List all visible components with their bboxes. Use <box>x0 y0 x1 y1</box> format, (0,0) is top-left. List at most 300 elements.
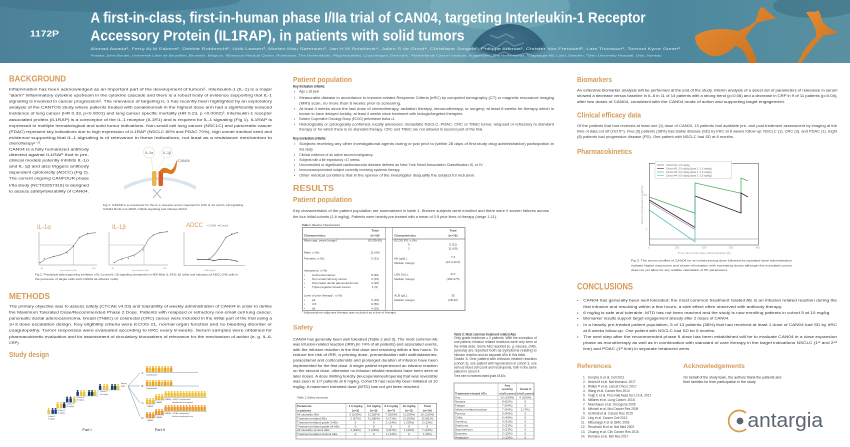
heading: pharmacokinetics: Pharmacokinetics <box>577 149 632 156</box>
chart: IL-1 beta: Concentration (nM) <box>131 269 149 272</box>
text block: background intro: Inflammation has been acknowledged as an important part of the development of tumors¹. Interleukin-1 (IL-1) is a major <box>9 86 273 91</box>
text block: reference list: 4. <box>583 389 586 393</box>
panel: acknowledgements <box>683 363 782 384</box>
text block: inclusion criteria: Age ≥ 18 year. <box>299 90 320 94</box>
chart: ADCC: CAN (µg/mL) <box>204 269 216 272</box>
text block: background intro: “alarm” inflammatory cytokine upstream in the cytokine cascade and there is a robust body of evidence supporting that IL-1 <box>9 92 272 98</box>
text block: inclusion criteria: • <box>294 122 295 126</box>
heading: references: References <box>577 363 612 370</box>
table 2: safety summary: 1 (6%) <box>423 432 432 436</box>
title <box>90 10 646 44</box>
chart: ADCC: CAN04 <box>208 224 217 228</box>
text block: methods: The primary objective was to assess safety (CTCAE v4.03) and tolerability of weekly administration of CAN04 in order to define <box>9 304 272 308</box>
text block: reference list: Muenbauer et al. Oncogene 2006 <box>588 402 636 406</box>
text block: background intro: associated protein (IL1RAP) is a coreceptor of the IL-1 receptor (IL1R1) and is required for IL-1 signaling (Fig 1). IL1RAP is <box>9 117 272 122</box>
axes labels: 1 <box>646 227 648 231</box>
text block: conclusions: • <box>577 334 579 339</box>
table 3: treatment related adverse events: 8 (62%) <box>502 400 513 404</box>
table 2: safety summary: 16 (100%) <box>420 413 434 417</box>
part II arms: CAN04 + NSCLC combination <box>165 398 190 401</box>
table 1: baseline characteristics: (182-475) <box>446 277 460 281</box>
table 2: safety summary: Parameter, <box>297 404 313 408</box>
text block: table 3 note: infusion reaction and as separate AEs in this table. <box>454 353 526 357</box>
text block: reference list: Reuchard M et al. Nat Med 2003 <box>588 425 634 429</box>
text block: exclusion criteria: Immunocompromised subject currently receiving systemic therapy. <box>299 168 400 172</box>
table 3: treatment related adverse events: Infusion-related reaction <box>455 408 488 412</box>
title: A first-in-class, first-in-human phase I/IIa trial of CAN04, targeting Interleukin-1 Receptor <box>90 10 646 26</box>
text block: conclusions: 6 mg/kg is safe and tolerable. MTD has not been reached and the study is now enrolling patients in cohort 5 at 10 mg/kg <box>583 310 829 315</box>
text block: reference list: 5. <box>583 394 586 398</box>
text block: exclusion criteria: • <box>294 174 295 178</box>
text block: reference list: Zhuang et al. Clin Cancer Res 2015 <box>588 430 639 434</box>
table 1: baseline characteristics: 3 (19) <box>371 277 379 281</box>
text block: safety: CAN04 has generally been well tolerated (Table 2 and 3). The most common AE <box>293 336 438 341</box>
table 3: treatment related adverse events: Any <box>455 396 461 400</box>
text block: inclusion criteria: At least 4 weeks since the last dose of chemotherapy, radiation therapy, immunotherapy, or surgery; at least 6 weeks for therapy which is <box>299 107 555 111</box>
text block: CAN04 description: The current ongoing CANFOUR phase <box>9 175 89 180</box>
text block: conclusions: phase as monotherapy as well as in combination with standard of care therapy in the target indications NSCLC (1ˢᵗ and 2ⁿᵈ <box>583 340 838 345</box>
table 1: baseline characteristics: • <box>304 277 305 281</box>
text block: safety: paracetamol and corticosteroids and prolonged duration of infusion have been <box>293 358 438 362</box>
table 3: treatment related adverse events: 0 <box>524 428 526 432</box>
chart: IL-1 alpha <box>37 225 97 272</box>
table 3: treatment related adverse events: 3 (23%) <box>502 424 513 428</box>
legend: Cohort #3: 6.0 mg/kg (dose 1: 1.0 mg/kg) <box>666 171 712 174</box>
text block: reference list: 9. <box>583 412 586 416</box>
text block: inclusion criteria: known to have delayed toxicity; at least 4 weeks since treatment with biologic/targeted therapies. <box>299 112 463 116</box>
text block: clinical efficacy: time of data cut off (Oct 5ᵗʰ). Five (5) patients (38%) had stable disease (SD) by IrRC at 8 weeks follow-up: NSCLC (1), CRC (3), and PDAC (1). Eight <box>577 130 837 134</box>
header banner <box>0 0 850 63</box>
text block: reference list: 3. <box>583 384 586 388</box>
part I cohort escalation: Cohort 2 <box>58 409 65 412</box>
table 1: baseline characteristics: • <box>304 302 305 306</box>
table 2: safety summary: Total <box>424 404 431 408</box>
chart: IL-1 alpha: -10 <box>40 268 44 270</box>
text block: acknowledgements <box>683 375 782 384</box>
part II arms: CAN04 <box>147 405 153 408</box>
text block: reference list: Ridker P et al. Lancet Oncol. 2017 <box>588 384 637 388</box>
text block: reference list: Mitsunaga K et al. BMC 2003 <box>588 421 630 425</box>
table 2: safety summary: 3 (100%) <box>368 416 380 420</box>
text block: reference list: 14. <box>581 434 586 438</box>
table 2: safety summary: 1 (14%) <box>386 420 397 424</box>
table 1: baseline characteristics: Characteristics <box>394 234 416 238</box>
table 1: baseline characteristics: 8 (50) <box>371 273 379 277</box>
table 1: baseline characteristics: ≥6 <box>312 306 316 310</box>
table 1: baseline characteristics: • <box>304 281 305 285</box>
table 2: safety summary: Treatment-related grade 3 AEs <box>297 420 338 424</box>
text block: safety: was infusion-related reaction (IRR) (in 74% of all patients) and associated events, <box>293 342 438 347</box>
caption: figure 3: does not yet allow for any reliable calculation of PK parameters. <box>631 268 728 272</box>
text block: background intro: (PDAC) represent key indications due to high expression of IL1RAP (NSCLC 80% and PDAC 70%), high unmet medical need and <box>9 129 272 134</box>
table 1: baseline characteristics: Median (range) <box>394 261 415 265</box>
text block: table 3 note: one patient, infusion related reactions were only seen at <box>454 340 537 344</box>
text block: patient summary: Key characteristics of the patient population are summarized in table 1. Sixteen subjects were enrolled and there were 0 screen failures across <box>293 209 550 213</box>
table 1: baseline characteristics: ECOG PS, n (%) <box>394 238 417 242</box>
table 2: safety summary: 0 <box>373 432 375 436</box>
table 2: safety summary: 1 (14%) <box>386 432 397 436</box>
text block: reference list: 12. <box>581 425 586 429</box>
table 3: treatment related adverse events: 2 (15%) <box>502 436 513 440</box>
table 1: baseline characteristics: 11 (69) <box>448 246 458 250</box>
table 3: treatment related adverse events: 6 (46%) <box>502 412 513 416</box>
table 2: safety summary: 3 (100%) <box>403 416 415 420</box>
table 1: baseline characteristics: 4 (25) <box>371 306 379 310</box>
table 2: safety summary: 3.0 mg/kg <box>367 404 381 408</box>
part II arms: A <box>142 371 144 375</box>
table 3: treatment related adverse events: 7 (54%) <box>502 408 513 412</box>
panel: safety <box>293 324 537 440</box>
table 2: safety summary: (n=3) <box>352 408 359 412</box>
text block: acknowledgements: their families for their participation in the study. <box>683 380 756 384</box>
table 1: baseline characteristics: Characteristics <box>304 234 326 238</box>
caption: figure 1: CAN04 binds to IL1RAP, inhibits signaling and induces ADCC. <box>103 207 188 211</box>
table 2: safety summary: (n=3) <box>405 408 413 412</box>
table 1: baseline characteristics: Median (range) <box>394 298 415 302</box>
table 3: treatment related adverse events: Headache <box>455 436 469 440</box>
table 1: baseline characteristics: (n=16) <box>371 234 379 238</box>
text block: clinical efficacy: Of the patients that had received at least one (1) dose of CAN04, 13 patients had available pre- and post-treatment assessment by imaging at the <box>577 124 837 128</box>
text block: CAN04 description: and IL-1β and also triggers antibody <box>9 163 89 168</box>
table 3: treatment related adverse events: Diarrhoea <box>455 424 469 428</box>
part II arms: first-line standard-of-care <box>172 415 193 418</box>
table 3: treatment related adverse events <box>454 383 534 440</box>
table 2: safety summary: (n=3) <box>370 408 377 412</box>
table 2: safety summary: 7 (44%) <box>422 428 433 432</box>
table 3: treatment related adverse events: n (all cases) <box>499 391 516 395</box>
table 1: baseline characteristics: Total <box>450 228 457 232</box>
table 2: safety summary: n patients <box>297 408 311 412</box>
figure 1: mechanism diagram <box>124 147 196 198</box>
caption: figure 2: the presence of target cells with CAN04 as effector cells). <box>35 277 119 281</box>
table 1: baseline characteristics: Hb (g/dL), <box>394 256 408 260</box>
arm B <box>146 380 199 386</box>
axes labels: Time since first dose administration [h] <box>678 251 730 255</box>
table 1: baseline characteristics: 3 (19) <box>371 298 379 302</box>
panel: biomarkers <box>577 77 838 104</box>
text block: conclusions: line) and PDAC (1ˢᵗ line) in separate treatment arms <box>583 346 689 351</box>
table 2: safety summary <box>296 396 437 439</box>
arm D <box>146 405 207 418</box>
table 3: treatment related adverse events: severity <box>502 387 513 391</box>
text block: inclusion criteria <box>293 84 555 131</box>
part I cohort escalation: Biopsy <box>121 383 127 385</box>
text block: reference list: 11. <box>581 421 585 425</box>
table 2: safety summary: 1 (33%) <box>369 428 379 432</box>
panel: conclusions <box>577 282 838 351</box>
text block: conclusions <box>577 298 838 351</box>
table 3: treatment related adverse events: Fatigue <box>455 404 465 408</box>
table 3: treatment related adverse events: Chills <box>455 416 463 420</box>
table 3: treatment related adverse events: 0 <box>524 424 526 428</box>
text block: safety: mg/kg. A maximum tolerated dose (MTD) has not yet been reached. <box>293 384 420 389</box>
table 3: treatment related adverse events: 0 <box>524 432 526 436</box>
text block: biomarkers <box>577 88 838 104</box>
cyan series <box>649 195 695 242</box>
table 2: safety summary: 0 <box>355 424 357 428</box>
table 2: safety summary: Treatment-related serious AEs <box>297 432 338 436</box>
text block: patient summary <box>293 209 550 219</box>
text block: background intro: evidence supporting that IL-1 signaling is of relevance in these indications, not least as a resistance mechanism to <box>9 135 272 140</box>
table 2: safety summary: Treatment-related AEs <box>297 416 327 420</box>
text block: table 3 note: pyrexia) are reported both as symptoms relating to <box>454 348 537 352</box>
table 1: baseline characteristics: * Adjuvant/neo-adjuvant therapy was included as a line of therapy <box>302 312 397 314</box>
chart: IL-1 beta: -10 <box>111 268 115 270</box>
panel: references <box>577 363 651 438</box>
table 3: treatment related adverse events: 0 <box>524 416 526 420</box>
chart: ADCC <box>184 223 245 272</box>
text block: conclusions: The next step after the recommended phase II dose has been established will be to evaluate CAN04 in a dose expansion <box>583 334 837 339</box>
table 2: safety summary: 3 (100%) <box>368 413 380 417</box>
text block: biomarkers: after two doses of CAN04, consistent with the CAN04 mode of action and supporting target engagement. <box>577 99 785 104</box>
table 1: baseline characteristics: Lines of prior therapy*, n (%) <box>304 294 342 298</box>
text block: conclusions: at 8 weeks follow-up. One patient with NSCLC had SD for 6 months. <box>583 328 715 333</box>
table 1: baseline characteristics: 4 (25) <box>371 281 379 285</box>
part II arms: D <box>142 416 144 420</box>
text block: reference list: Schmall et al. Cancer Res 2015 <box>588 412 633 416</box>
text block: inclusion criteria: Eastern Cooperative Oncology Group (ECOG) performance status ≤1. <box>299 117 395 121</box>
chart: IL-1 alpha: Concentration (nM) <box>59 269 77 272</box>
part II arms: Combination <box>146 374 157 376</box>
text block: CAN04 description: directed against IL1RAP that in pre- <box>9 152 90 157</box>
chart: ADCC: ADCC <box>186 223 204 229</box>
part II arms: Combination <box>146 387 157 390</box>
table 2: safety summary: All causality AEs <box>297 413 320 417</box>
axes labels: 200 <box>702 246 707 250</box>
text block: methods: 3+3 dose escalation design. Key eligibility criteria were ECOG ≤1, normal organ function and no bleeding disorder or <box>9 322 273 327</box>
table 1: baseline characteristics: Mean age, years (range) <box>304 238 337 242</box>
table 2: safety summary: 4 (57%) <box>386 428 397 432</box>
text block: inclusion criteria: • <box>294 107 295 111</box>
text block: safety: reduce the risk of IRR, a priming dose, premedication with antihistamines, <box>293 352 438 357</box>
text block: clinical efficacy: (8) patients had progressive disease (PD). One patient with NSCLC had SD at 6 months. <box>577 135 734 139</box>
text block: safety: was seen in 1/7 patients at 6 mg/kg. Cohort 5 has recently been initiated at 10 <box>293 379 439 384</box>
table 3: treatment related adverse events: Nausea <box>455 400 466 404</box>
caption: figure 1: Fig 1. IL1RAP is a coreceptor for the IL-1 receptor and is required for both IL-1α and IL-1β signaling. <box>103 203 244 207</box>
part I cohort escalation: 1 mg/kg <box>48 418 55 420</box>
legend: Cohort #1: 1.0 mg/kg <box>666 164 690 167</box>
axes labels: 10 <box>644 193 647 197</box>
text block: background intro: chemotherapy⁴⁻¹³. <box>9 140 41 145</box>
text block: safety: implemented for the first dose. A single patient experienced an infusion reaction <box>293 363 438 368</box>
table 1: baseline characteristics: 9 (56) <box>371 302 379 306</box>
chart: PK profiles <box>640 162 761 255</box>
table 1: baseline characteristics: Colorectal cancer <box>312 273 335 277</box>
legend: Cohort #2: 3.0 mg/kg (dose 1: 1.0 mg/kg) <box>666 168 712 170</box>
table 3: treatment related adverse events: 0 <box>524 436 526 440</box>
table 3: treatment related adverse events: Dyspnea <box>455 432 467 436</box>
text block: table 3 note: Table 3: Most common treatment related AEs <box>454 332 516 336</box>
text block: reference list: 2. <box>583 380 586 384</box>
heading: clinical efficacy data: Clinical efficacy data <box>577 112 641 120</box>
text block: reference list: 13. <box>581 430 586 434</box>
text block: reference list: Voigt C et al. Proc Natl Acad Sci U S A. 2017 <box>588 394 651 398</box>
text block: exclusion criteria: Clinical evidence of an active second malignancy. <box>299 153 373 157</box>
table 3: treatment related adverse events: 1 (7%) <box>521 408 530 412</box>
table 1: baseline characteristics: Median (range) <box>394 277 415 281</box>
text block: inclusion criteria: • <box>294 117 295 121</box>
table 2: safety summary: (n=7) <box>388 408 395 412</box>
chart: IL-1 alpha: 100 <box>92 268 96 270</box>
table 1: baseline characteristics: 5 (31) <box>371 256 379 260</box>
axes labels: Serum concentration [µg/mL] <box>640 186 644 224</box>
table 1: baseline characteristics: LDH (U/L), <box>394 272 409 276</box>
table 3: treatment related adverse events: 6 (46%) <box>502 416 513 420</box>
text block: methods: pancreatic ductal adenocarcinoma, breast (TNBC) or colorectal (CRC) cancer were included in the initial part of the trial using a <box>9 316 273 320</box>
text block: table 3 note: serious blood cell count and neutropenia, both in the same <box>454 366 537 370</box>
text block: exclusion criteria: this study. <box>299 147 314 151</box>
table 2: safety summary: 0 <box>373 424 375 428</box>
text block: reference list: 6. <box>583 398 586 402</box>
table 1: baseline characteristics: (n=16) <box>449 234 457 238</box>
chart: IL-1 alpha: IL-1α <box>37 225 51 231</box>
table 1: baseline characteristics: 1 <box>408 246 410 250</box>
text block: biomarkers: showed a decrease versus baseline in IL-6 in 11 of 14 patients with a strong trend (p=0.06) and a decrease in CRP in 9 of 11 patients (p=0.04), <box>577 93 838 98</box>
table 1: baseline characteristics: Pancreatic ductal adenocarcinoma <box>312 281 358 285</box>
heading: study design: Study design <box>9 352 49 359</box>
table 1: baseline characteristics: Male, n (%) <box>304 250 319 254</box>
chart: IL-1 beta: IL-1β <box>112 225 126 231</box>
figure 1: mechanism diagram: IL-1β <box>163 151 171 155</box>
table 2: safety summary: 0 <box>426 424 428 428</box>
table 2: safety summary: 3 (100%) <box>403 413 415 417</box>
text block: biomarkers: An extensive biomarker analysis will be performed at the end of the study. Interim analysis of a select set of parameters of relevance in serum <box>577 88 838 92</box>
text block: table 3 note: the initial dose. Some AEs reported (e. g. nausea, chills, <box>454 344 537 348</box>
text block: background intro: signaling is involved in cancer progression². The relevance of targeting IL-1 has recently been highlighted by an exploratory <box>9 99 272 104</box>
text block: exclusion criteria: Key exclusion criteria: <box>293 136 326 140</box>
part II arms: CAN04 <box>156 401 162 404</box>
text block: methods: the Maximum Tolerated Dose/Recommended Phase 2 Dose. Patients with relapsed or refractory non-small cell lung cancer, <box>9 310 272 315</box>
table 3: treatment related adverse events: 0 <box>524 420 526 424</box>
text block: acknowledgements: On behalf of the study team, the authors thank the patients and <box>683 375 782 379</box>
diagram: study design <box>47 366 207 432</box>
table 1: baseline characteristics: Females, n (%) <box>304 256 324 260</box>
axes labels: 400 <box>756 246 761 250</box>
table 2: safety summary: All causality serious AEs <box>297 428 330 432</box>
table 3: treatment related adverse events: Treatment-related AEs <box>455 391 487 395</box>
heading: methods: METHODS <box>9 291 50 301</box>
table 2: safety summary: 0 <box>373 420 375 424</box>
chart: ADCC: Control <box>220 224 229 228</box>
table 2: safety summary: 0 <box>355 420 357 424</box>
text block: patient summary: the four initial cohorts (1-6 mg/kg). Patients were heavily pre-treated with a mean of 3.9 prior lines of therapy (range 1-11). <box>293 215 497 219</box>
table 1: baseline characteristics: 0 <box>408 242 410 246</box>
table 1: baseline characteristics: • <box>304 306 305 310</box>
axes labels: 300 <box>729 246 734 250</box>
table 2: safety summary: 2 (13%) <box>422 420 433 424</box>
figure 1: mechanism diagram: IL-1α <box>145 151 153 155</box>
caption: figure 2: Fig 2. Preclinical data supporting inhibition of IL-1α and IL-1β signaling (measured in HEK-Blue IL-33/IL-1β cells) and induction of ADCC (NK cells in <box>35 272 238 276</box>
text block: reference list: 1. <box>583 375 586 379</box>
table 1: baseline characteristics: • <box>304 273 305 277</box>
text block: exclusion criteria: • <box>294 163 295 167</box>
caption: figure 3 <box>631 259 793 272</box>
text block: methods <box>9 304 273 345</box>
text block: reference list: 10. <box>581 416 586 420</box>
table 3: treatment related adverse events: 13 (100%) <box>500 396 514 400</box>
text block: reference list: 7. <box>583 402 586 406</box>
text block: table 3 note: Only grade incidence ≥ 2 patients. With the exception of <box>454 336 537 340</box>
table 3: treatment related adverse events: Grade 3 <box>520 387 531 391</box>
text block: conclusions: • <box>577 316 579 320</box>
table 1: baseline characteristics: (28-40) <box>448 298 458 302</box>
text block: exclusion criteria: • <box>294 158 295 162</box>
part I cohort escalation: 10 mg/kg <box>100 394 108 396</box>
text block: safety: on the second dose, otherwise no infusion related reactions have been seen at <box>293 368 439 373</box>
text block: reference list: Dunphy G et al. Cell 2011 <box>588 375 624 379</box>
part I cohort escalation <box>47 383 127 420</box>
image: virus particle <box>465 24 552 63</box>
table 3: treatment related adverse events: 4 (31%) <box>502 420 513 424</box>
text block: table 3 note: (cohort 3), one patient with hypotension in cohort 3, one <box>454 362 537 366</box>
text block: exclusion criteria: • <box>294 168 295 172</box>
panel: pharmacokinetics <box>577 149 793 272</box>
part II arms <box>128 366 207 422</box>
table 2: safety summary: 1 (33%) <box>350 428 361 432</box>
dark series <box>649 193 748 228</box>
table 2: safety summary: Treatment-related grade ≥4 AEs <box>297 424 340 428</box>
axes labels <box>640 186 761 255</box>
table 2: safety summary: 2 (67%) <box>350 416 361 420</box>
arm C <box>146 391 207 404</box>
part II arms: CAN04 <box>147 419 153 422</box>
chart: IL-1 beta <box>109 225 168 272</box>
text block: safety: with the infusion reaction in the first dose and resolving within a few hours. To <box>293 347 438 352</box>
text block: table 3 note: Grade 3: One patient with infusion related reaction <box>454 357 537 361</box>
table 2: safety summary: (n=16) <box>423 408 432 412</box>
table 1: baseline characteristics: 1 (6) <box>372 285 378 289</box>
title: Accessory Protein (IL1RAP), in patients with solid tumors <box>90 28 464 44</box>
part I cohort escalation: Cohort 3 <box>67 402 74 406</box>
part II arms: CAN04 <box>156 416 162 419</box>
text block: inclusion criteria: • <box>294 96 295 100</box>
part II arms: standard-of-care regimen <box>172 401 193 404</box>
text block: conclusions: • <box>577 310 579 315</box>
text block: conclusions: CAN04 has generally been well tolerated; the most common treatment related AE is an infusion related reaction during the <box>583 298 837 302</box>
table 3: treatment related adverse events: 0 <box>524 404 526 408</box>
table 3: treatment related adverse events: Any <box>504 384 510 388</box>
table 2: safety summary: 0 <box>408 432 410 436</box>
table 2: safety summary: 13 (81%) <box>421 416 433 420</box>
part I cohort escalation: Cohort 4 <box>77 396 84 399</box>
table 1: baseline characteristics: 11 (69) <box>370 250 380 254</box>
text block: reference list: Ling et al. Cancer Cell 2012 <box>588 416 628 420</box>
table 3: treatment related adverse events: 2 (15%) <box>502 432 513 436</box>
panel: patient population criteria <box>293 77 555 178</box>
text block: CAN04 description: I/IIa study (NCT03267316) is designed <box>9 182 89 187</box>
table 1: baseline characteristics: Non-small cell lung cancer <box>312 277 347 281</box>
table 3: treatment related adverse events: 4 (100%) <box>519 396 531 400</box>
heading: safety: Safety <box>293 324 313 332</box>
text block: conclusions: In a heavily pre-treated patient population, 5 of 13 patients (38%) that had received at least 1 dose of CAN04 had SD by IrRC <box>583 322 837 327</box>
part I cohort escalation: Cohort 1 <box>48 415 55 418</box>
table 1: baseline characteristics: • <box>304 298 305 302</box>
axes labels: 0 <box>648 246 650 250</box>
heading: biomarkers: Biomarkers <box>577 77 612 84</box>
heading: patient population: Patient population <box>293 77 352 84</box>
caption: figure 2 <box>35 272 238 281</box>
legend: Cohort #4: 6.0 mg/kg (dose 1: 3.0 mg/kg) <box>666 174 712 178</box>
table 1: baseline characteristics: 7.4 <box>451 255 455 259</box>
table 2: safety summary: 0 <box>355 432 357 436</box>
text block: background intro <box>9 86 273 145</box>
authors: Ahmad Awada¹, Ferry ALM Eskens², Debbie Robbrecht², Ulrik Lassen³, Morten Mau Sørensen³, Jan H M Schellens⁴, Jolien S de Groot⁴, Christiane Jungels¹, Philippe Aftimos¹, Christer Von Frenckell⁵, Lars Thorsson⁵, Tormod Kyrre Guren⁶ <box>90 46 681 51</box>
table 1: baseline characteristics: Total <box>372 228 379 232</box>
table 1: baseline characteristics: ≤2 <box>312 298 316 302</box>
heading: conclusions: CONCLUSIONS <box>577 282 633 292</box>
text block: CAN04 description: dependent cytotoxicity (ADCC) (Fig 2). <box>9 169 89 174</box>
text block: conclusions: • <box>577 298 579 302</box>
